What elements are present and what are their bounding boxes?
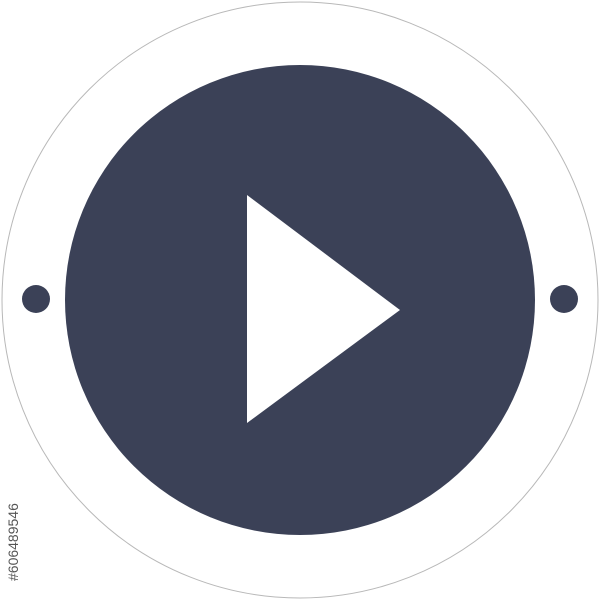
icon: play triangle (247, 195, 400, 423)
main disc (65, 65, 535, 535)
icon: right dot (550, 285, 578, 313)
icon: left dot (22, 285, 50, 313)
stock id text: #606489546 (5, 503, 21, 581)
